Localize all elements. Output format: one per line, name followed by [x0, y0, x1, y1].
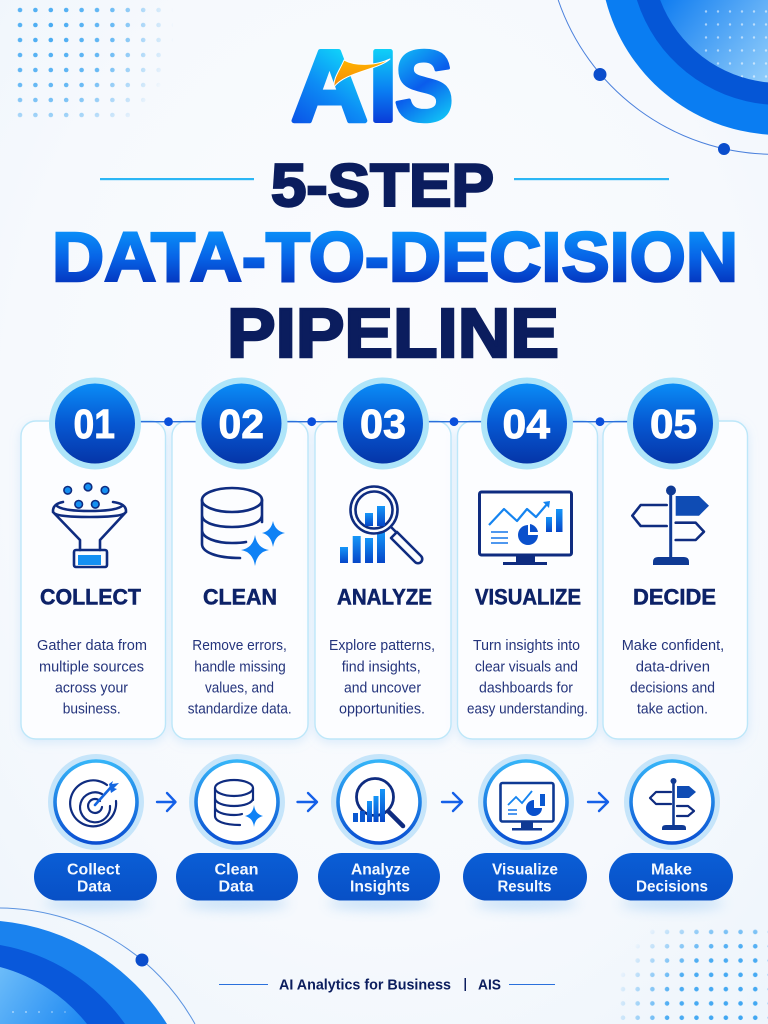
heading: CLEAN	[203, 584, 277, 610]
flow item: collect data	[34, 757, 157, 910]
pill label: Collect	[67, 862, 121, 878]
corner decoration: bottom left	[0, 908, 195, 1024]
title line: DATA-TO-DECISION: DATA-TO-DECISION	[52, 218, 738, 296]
icon: magnifier with bars	[340, 486, 422, 563]
arrow	[442, 793, 462, 811]
description	[329, 637, 435, 718]
arrow	[588, 793, 608, 811]
logo: AIS: A	[292, 30, 368, 142]
description: easy understanding.	[467, 700, 588, 718]
footer: AIS	[478, 978, 501, 994]
icon: dashboard monitor	[500, 783, 554, 830]
description: Gather data from	[37, 637, 147, 654]
pill label	[463, 853, 587, 900]
description: clear visuals and	[475, 658, 578, 676]
pill label	[318, 853, 440, 900]
pill label: Clean	[214, 862, 258, 878]
description: Remove errors,	[192, 637, 287, 654]
badge: 04: 04	[502, 401, 550, 447]
pill label: Make	[651, 862, 692, 878]
description: values, and	[205, 680, 274, 696]
footer	[219, 978, 555, 994]
pill label: Data	[218, 878, 254, 896]
logo: AIS	[292, 30, 454, 142]
flow item: analyze insights	[318, 757, 440, 910]
description: Explore patterns,	[329, 637, 435, 654]
pill label	[176, 853, 298, 900]
panel: step 1 collect	[21, 421, 166, 739]
heading: ANALYZE	[337, 584, 432, 610]
flow item: make decisions	[609, 757, 733, 910]
description: decisions and	[630, 680, 715, 696]
description: across your	[55, 680, 128, 696]
description	[188, 637, 292, 718]
description	[622, 637, 724, 718]
pill label: Results	[498, 878, 552, 896]
logo: AIS: I	[369, 30, 397, 142]
badge: 03: 03	[360, 401, 406, 447]
description: standardize data.	[188, 700, 292, 718]
badge: 01	[52, 380, 138, 466]
description: handle missing	[194, 658, 286, 676]
description: find insights,	[342, 658, 421, 676]
icon: signpost	[632, 486, 709, 565]
pill label	[34, 853, 157, 900]
description: and uncover	[344, 680, 421, 696]
icon: signpost	[650, 778, 696, 830]
pill label: Data	[77, 878, 111, 896]
description: Turn insights into	[473, 637, 580, 654]
heading: VISUALIZE	[475, 584, 581, 610]
connector: numbered badge timeline	[140, 417, 632, 426]
badge: 01: 01	[74, 401, 115, 447]
description: take action.	[637, 700, 708, 718]
title line: PIPELINE: PIPELINE	[227, 294, 559, 372]
badge: 05	[630, 380, 716, 466]
pill label: Analyze	[351, 862, 410, 878]
title line: 5-STEP: 5-STEP	[271, 152, 494, 219]
badge: 05: 05	[650, 401, 697, 447]
arrow	[298, 793, 317, 811]
panel: step 3 analyze	[315, 421, 451, 739]
footer: AI Analytics for Business	[279, 978, 451, 994]
flow item: visualize results	[463, 757, 587, 910]
heading: DECIDE	[633, 584, 716, 610]
pill label: Decisions	[636, 878, 708, 896]
description	[467, 637, 588, 718]
panel: step 4 visualize	[458, 421, 598, 739]
description: dashboards for	[479, 680, 573, 696]
icon: dashboard monitor	[480, 492, 572, 565]
logo: AIS: S	[394, 30, 454, 142]
corner decoration: top right	[558, 0, 768, 155]
badge: 04	[484, 380, 570, 466]
description: data-driven	[636, 658, 710, 676]
dot grid: top left	[18, 8, 161, 118]
description: business.	[63, 700, 121, 718]
panel: step 5 decide	[603, 421, 748, 739]
icon: funnel	[53, 483, 126, 567]
icon: database with sparkle	[215, 780, 263, 827]
badge: 02	[198, 380, 284, 466]
icon: database with sparkles	[202, 488, 285, 566]
icon: target with arrow	[70, 780, 119, 826]
description	[37, 637, 147, 718]
arrow	[157, 793, 176, 811]
icon: magnifier with bars	[353, 778, 403, 826]
badge: 02: 02	[218, 401, 264, 447]
description: multiple sources	[39, 658, 144, 676]
panel: step 2 clean	[172, 421, 308, 739]
heading: COLLECT	[40, 584, 142, 610]
dot grid: bottom right	[620, 929, 768, 1020]
description: Make confident,	[622, 637, 724, 654]
flow item: clean data	[176, 757, 298, 910]
badge: 03	[340, 380, 426, 466]
pill label: Insights	[350, 878, 410, 896]
description: opportunities.	[339, 700, 425, 718]
pill label: Visualize	[492, 862, 558, 878]
pill label	[609, 853, 733, 900]
